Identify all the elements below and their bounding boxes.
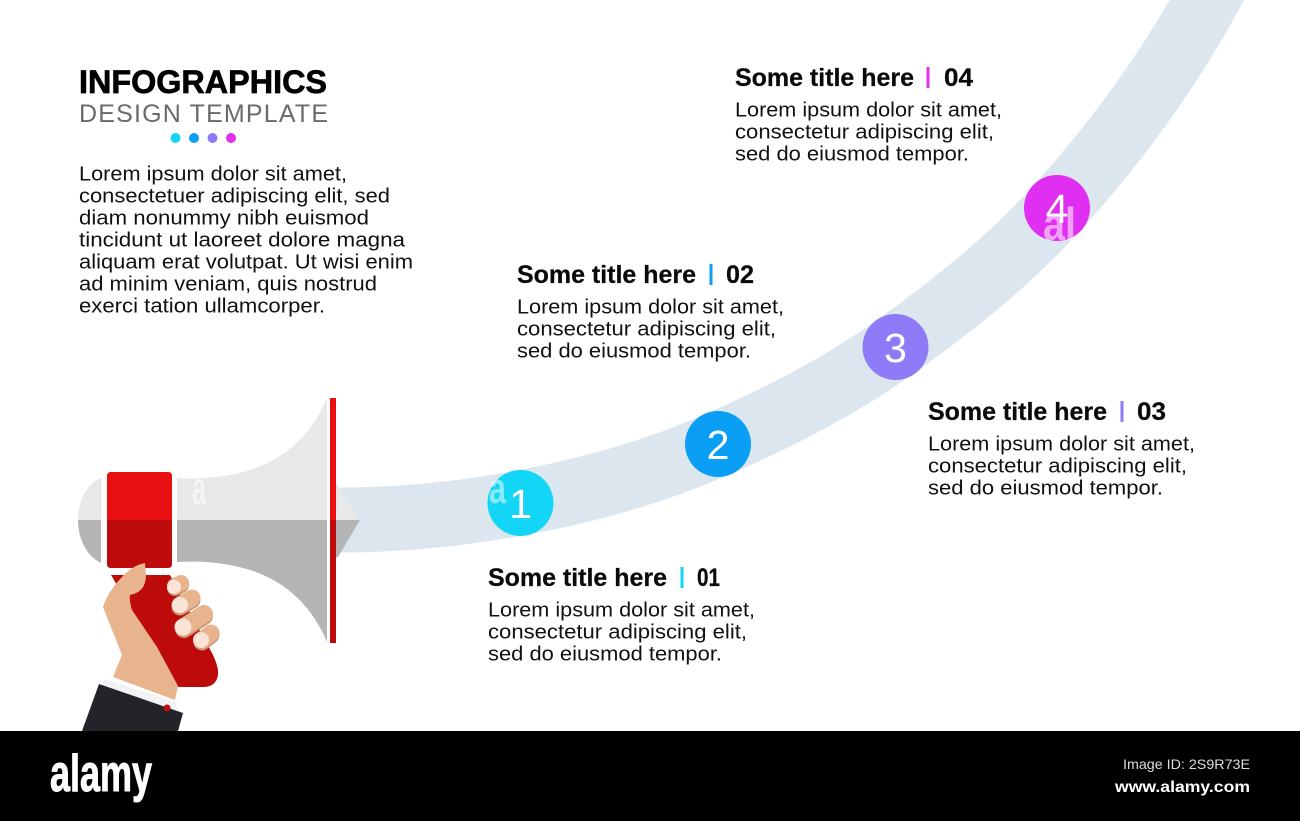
step 3 text: Some title here — [928, 398, 1107, 426]
step 3 text: sed do eiusmod tempor. — [928, 476, 1163, 500]
intro paragraph: tincidunt ut laoreet dolore magna — [79, 228, 406, 252]
step 4 text: Lorem ipsum dolor sit amet, — [735, 98, 1002, 122]
cuff button — [164, 704, 170, 712]
step 3 text: Lorem ipsum dolor sit amet, — [928, 432, 1195, 456]
shirt cuff — [99, 679, 177, 714]
intro paragraph: exerci tation ullamcorper. — [79, 294, 325, 318]
step 4 text: sed do eiusmod tempor. — [735, 142, 969, 166]
intro paragraph — [79, 162, 413, 318]
step 1 text: 01 — [697, 564, 720, 592]
step 1 marker: 1 — [509, 481, 532, 527]
title: INFOGRAPHICS — [79, 64, 327, 100]
step 2 text — [517, 261, 784, 362]
step 3 marker: 3 — [884, 325, 907, 371]
step 4 marker: al — [1043, 198, 1076, 250]
megaphone handle — [111, 575, 218, 687]
step 2 text: consectetur adipiscing elit, — [517, 318, 776, 340]
footer bar — [0, 731, 1300, 821]
step 3 text: consectetur adipiscing elit, — [928, 454, 1187, 478]
step 2 marker — [685, 411, 751, 477]
step 1 text: Lorem ipsum dolor sit amet, — [488, 598, 755, 622]
step 1 marker — [488, 464, 554, 536]
footer logo: alamy — [50, 745, 152, 803]
intro paragraph: aliquam erat volutpat. Ut wisi enim — [79, 250, 413, 274]
step 2 text: Lorem ipsum dolor sit amet, — [517, 296, 784, 318]
watermark letter on horn: a — [192, 462, 206, 514]
suit sleeve — [82, 684, 183, 731]
subtitle: DESIGN TEMPLATE — [79, 100, 328, 128]
step 2 text: Some title here — [517, 261, 696, 289]
step 1 marker: a — [489, 464, 506, 513]
step 1 text: Some title here — [488, 564, 667, 592]
intro paragraph: ad minim veniam, quis nostrud — [79, 272, 377, 296]
fingers — [175, 583, 211, 642]
step 2 marker: 2 — [707, 422, 729, 468]
icon: megaphone held in hand — [78, 398, 360, 731]
image id: Image ID: 2S9R73E — [1123, 756, 1250, 772]
megaphone tip — [336, 482, 360, 560]
step 4 text — [735, 64, 1002, 166]
step 2 text: 02 — [726, 261, 754, 289]
website: www.alamy.com — [1114, 779, 1250, 796]
megaphone horn — [177, 398, 327, 520]
step 4 marker — [1024, 175, 1090, 250]
step 1 text: sed do eiusmod tempor. — [488, 642, 722, 666]
header — [79, 64, 328, 143]
step 4 text: 04 — [944, 64, 973, 92]
step 3 text — [928, 398, 1195, 500]
step 1 text: consectetur adipiscing elit, — [488, 620, 747, 644]
step 3 marker — [862, 314, 928, 380]
step 4 marker: 4 — [1046, 186, 1068, 232]
megaphone back — [78, 478, 101, 520]
step 3 text: 03 — [1137, 398, 1166, 426]
intro paragraph: diam nonummy nibh euismod — [79, 206, 369, 230]
intro paragraph: consectetuer adipiscing elit, sed — [79, 184, 390, 208]
header dots — [170, 133, 236, 143]
intro paragraph: Lorem ipsum dolor sit amet, — [79, 162, 347, 186]
hand — [103, 563, 178, 700]
curved path band — [340, 0, 1230, 520]
step 4 text: Some title here — [735, 64, 914, 92]
fingernails — [167, 580, 209, 648]
horn rim — [330, 398, 336, 520]
step 2 text: sed do eiusmod tempor. — [517, 340, 751, 362]
step 4 text: consectetur adipiscing elit, — [735, 120, 994, 144]
megaphone collar — [107, 472, 172, 520]
step 1 text — [488, 564, 755, 666]
